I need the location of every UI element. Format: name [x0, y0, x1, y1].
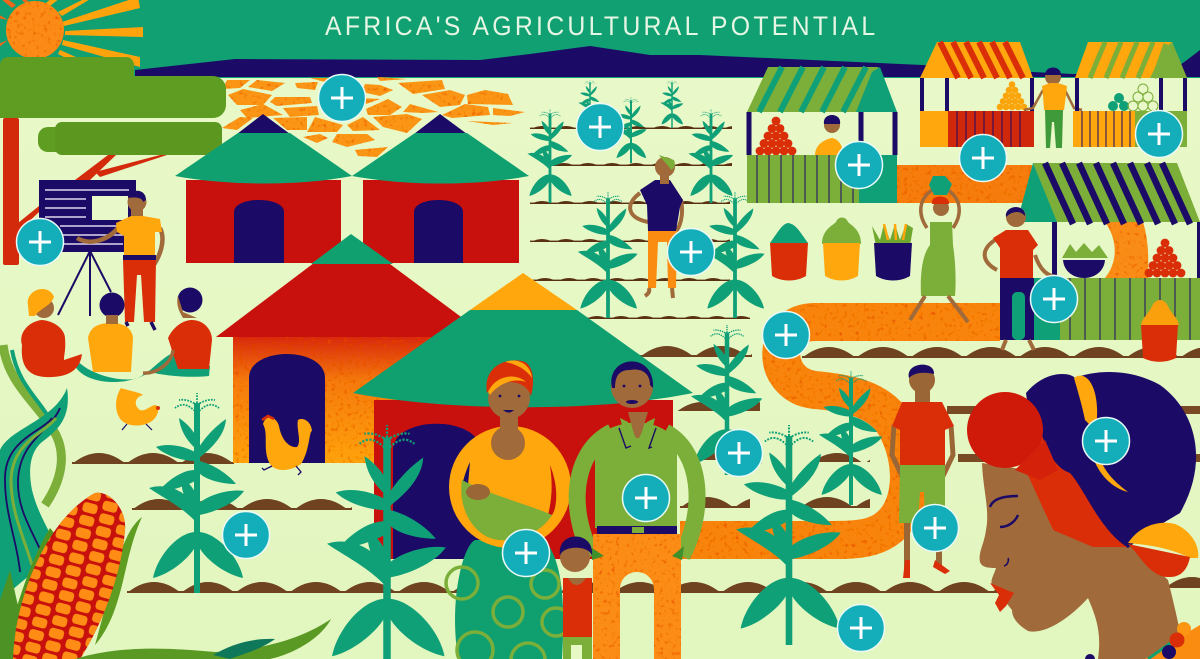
acacia tree: [0, 57, 226, 265]
hut: front with family: [353, 273, 693, 559]
plus button: man: [622, 474, 670, 522]
plus button: market man: [1030, 276, 1078, 322]
hut: top left: [175, 114, 352, 263]
woman with baby: [446, 360, 571, 659]
bucket of oranges: [1141, 300, 1179, 362]
large woman portrait: [967, 372, 1200, 659]
plus button: cracked ground: [318, 74, 366, 122]
chicken: large: [262, 416, 312, 475]
grain buckets: [770, 218, 913, 280]
plus button: boy: [912, 504, 958, 552]
cracked dry ground: [222, 77, 525, 157]
chicken: small: [116, 388, 160, 430]
plus button: stall two: [960, 134, 1006, 182]
market stall: yellow roof with fruit: [1073, 42, 1187, 147]
plus button: left field: [222, 512, 270, 558]
market stall: red and yellow roof: [920, 42, 1034, 147]
corn plants: [149, 80, 882, 645]
header band: [0, 0, 1200, 78]
teacher: [77, 191, 162, 330]
hut: middle: [216, 234, 488, 463]
plus button: farmer: [668, 228, 714, 276]
boy in green shorts: [892, 365, 954, 578]
distant mountains: [135, 46, 1200, 77]
plus button: stall one: [836, 142, 882, 188]
sun: [0, 0, 143, 67]
man: [577, 361, 697, 659]
winding orange path: [680, 322, 1000, 540]
orange strip behind stalls: [897, 165, 1032, 203]
corn cob and leaves: [0, 345, 331, 659]
audience seated: [21, 288, 212, 382]
soil rows: lower field: [72, 452, 1200, 593]
hut: top right: [352, 114, 529, 263]
plus button: maize: [716, 430, 762, 476]
plus button: portrait: [1082, 418, 1130, 464]
billboard with tripod: [39, 180, 136, 316]
plus button: field top: [576, 104, 624, 150]
plus button: stall three: [1136, 110, 1182, 158]
plus button: woman: [502, 530, 550, 576]
title: AFRICA'S AGRICULTURAL POTENTIAL: [325, 12, 875, 41]
market man in yellow shirt: [1024, 68, 1082, 148]
plus button: road: [762, 312, 810, 358]
woman carrying water jar: [910, 176, 968, 322]
plus button: bottom field: [838, 604, 884, 652]
market man in red shirt: [985, 207, 1058, 350]
farmer in field: [630, 155, 683, 298]
plus button: billboard: [16, 218, 64, 266]
soil rows: upper field: [530, 125, 1200, 508]
child: [560, 536, 592, 659]
tall corn plant in front of hut: [327, 425, 446, 659]
market stall: green roof with tomatoes: [747, 67, 897, 203]
market stall: navy stripe roof with bowl and tomatoes: [1017, 163, 1200, 340]
